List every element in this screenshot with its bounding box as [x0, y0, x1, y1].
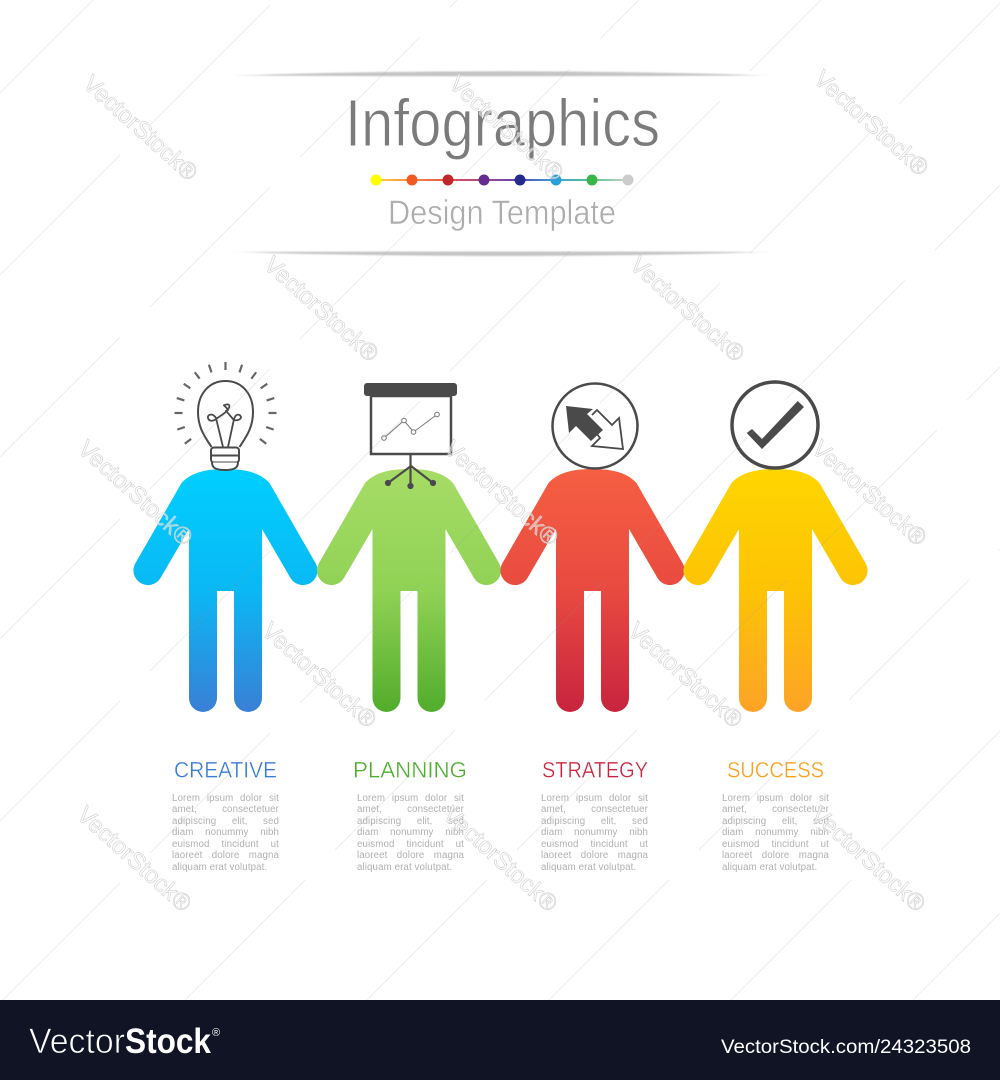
watermarks: VectorStock® — [443, 70, 569, 187]
footer logo: ® — [212, 1027, 220, 1039]
text block: planning: aliquam erat volutpat. — [357, 862, 452, 873]
watermarks: VectorStock® — [258, 251, 384, 368]
text block: strategy: laoreet dolore magna — [541, 850, 648, 861]
watermarks: VectorStock® — [256, 617, 382, 734]
text block: creative: laoreet dolore magna — [172, 850, 279, 861]
text block: strategy: amet, consectetuer — [541, 804, 648, 815]
watermarks: VectorStock® — [437, 801, 563, 918]
footer band — [0, 1000, 1000, 1080]
figure: yellow person — [683, 469, 868, 712]
text block: strategy — [541, 793, 648, 873]
text block: planning — [357, 793, 464, 873]
icon: check mark head — [732, 382, 818, 468]
heading: strategy: STRATEGY — [542, 758, 648, 782]
heading: creative: CREATIVE — [174, 758, 277, 782]
watermarks: VectorStock® — [805, 801, 931, 918]
figure: green person — [317, 469, 501, 712]
footer url: VectorStock.com/24323508 — [721, 1037, 971, 1058]
text block: success: laoreet dolore magna — [722, 850, 829, 861]
text block: planning: euismod tincidunt ut — [357, 839, 464, 850]
text block: success: Lorem ipsum dolor sit — [722, 793, 829, 804]
colored dot timeline — [370, 174, 634, 186]
text block: success: diam nonummy nibh — [722, 827, 829, 838]
watermarks: VectorStock® — [438, 435, 564, 552]
text block: planning: amet, consectetuer — [357, 804, 464, 815]
text block: strategy: euismod tincidunt ut — [541, 839, 648, 850]
icon: light bulb head — [174, 362, 276, 470]
text block: success: euismod tincidunt ut — [722, 839, 829, 850]
watermarks: VectorStock® — [72, 435, 198, 552]
text block: success: adipiscing elit, sed — [722, 816, 829, 827]
text block: planning: laoreet dolore magna — [357, 850, 464, 861]
text block: planning: diam nonummy nibh — [357, 827, 464, 838]
heading: success: SUCCESS — [727, 758, 824, 782]
footer logo: Stock — [125, 1022, 211, 1061]
text block: success: aliquam erat volutpat. — [722, 862, 817, 873]
icon: strategy arrows head — [552, 384, 638, 468]
footer logo: Vector — [29, 1022, 125, 1061]
header top shadow divider — [230, 71, 775, 76]
watermarks: VectorStock® — [624, 251, 750, 368]
text block: planning: Lorem ipsum dolor sit — [357, 793, 464, 804]
text block: creative: Lorem ipsum dolor sit — [172, 793, 279, 804]
subtitle: Design Template — [388, 194, 616, 232]
text block: planning: adipiscing elit, sed — [357, 816, 464, 827]
watermarks: VectorStock® — [71, 801, 197, 918]
text block: strategy: adipiscing elit, sed — [541, 816, 648, 827]
text block: creative — [172, 793, 279, 873]
watermarks: VectorStock® — [77, 70, 203, 187]
figure: red person — [500, 469, 685, 712]
text block: creative: aliquam erat volutpat. — [172, 862, 267, 873]
watermarks — [71, 65, 934, 918]
text block: strategy: Lorem ipsum dolor sit — [541, 793, 648, 804]
figure: blue person — [133, 469, 318, 712]
watermarks: VectorStock® — [806, 435, 932, 552]
text block: success: amet, consectetuer — [722, 804, 829, 815]
text block: creative: diam nonummy nibh — [172, 827, 279, 838]
text block: creative: amet, consectetuer — [172, 804, 279, 815]
text block: creative: euismod tincidunt ut — [172, 839, 279, 850]
text block: strategy: aliquam erat volutpat. — [541, 862, 636, 873]
header bottom shadow divider — [230, 252, 775, 256]
text block: strategy: diam nonummy nibh — [541, 827, 648, 838]
text block: success — [722, 793, 829, 873]
icon: presentation board head — [364, 383, 457, 488]
text block: creative: adipiscing elit, sed — [172, 816, 279, 827]
title: Infographics — [345, 86, 660, 161]
footer logo — [29, 1022, 220, 1061]
watermarks: VectorStock® — [622, 617, 748, 734]
watermarks: VectorStock® — [808, 65, 934, 182]
heading: planning: PLANNING — [353, 758, 467, 782]
